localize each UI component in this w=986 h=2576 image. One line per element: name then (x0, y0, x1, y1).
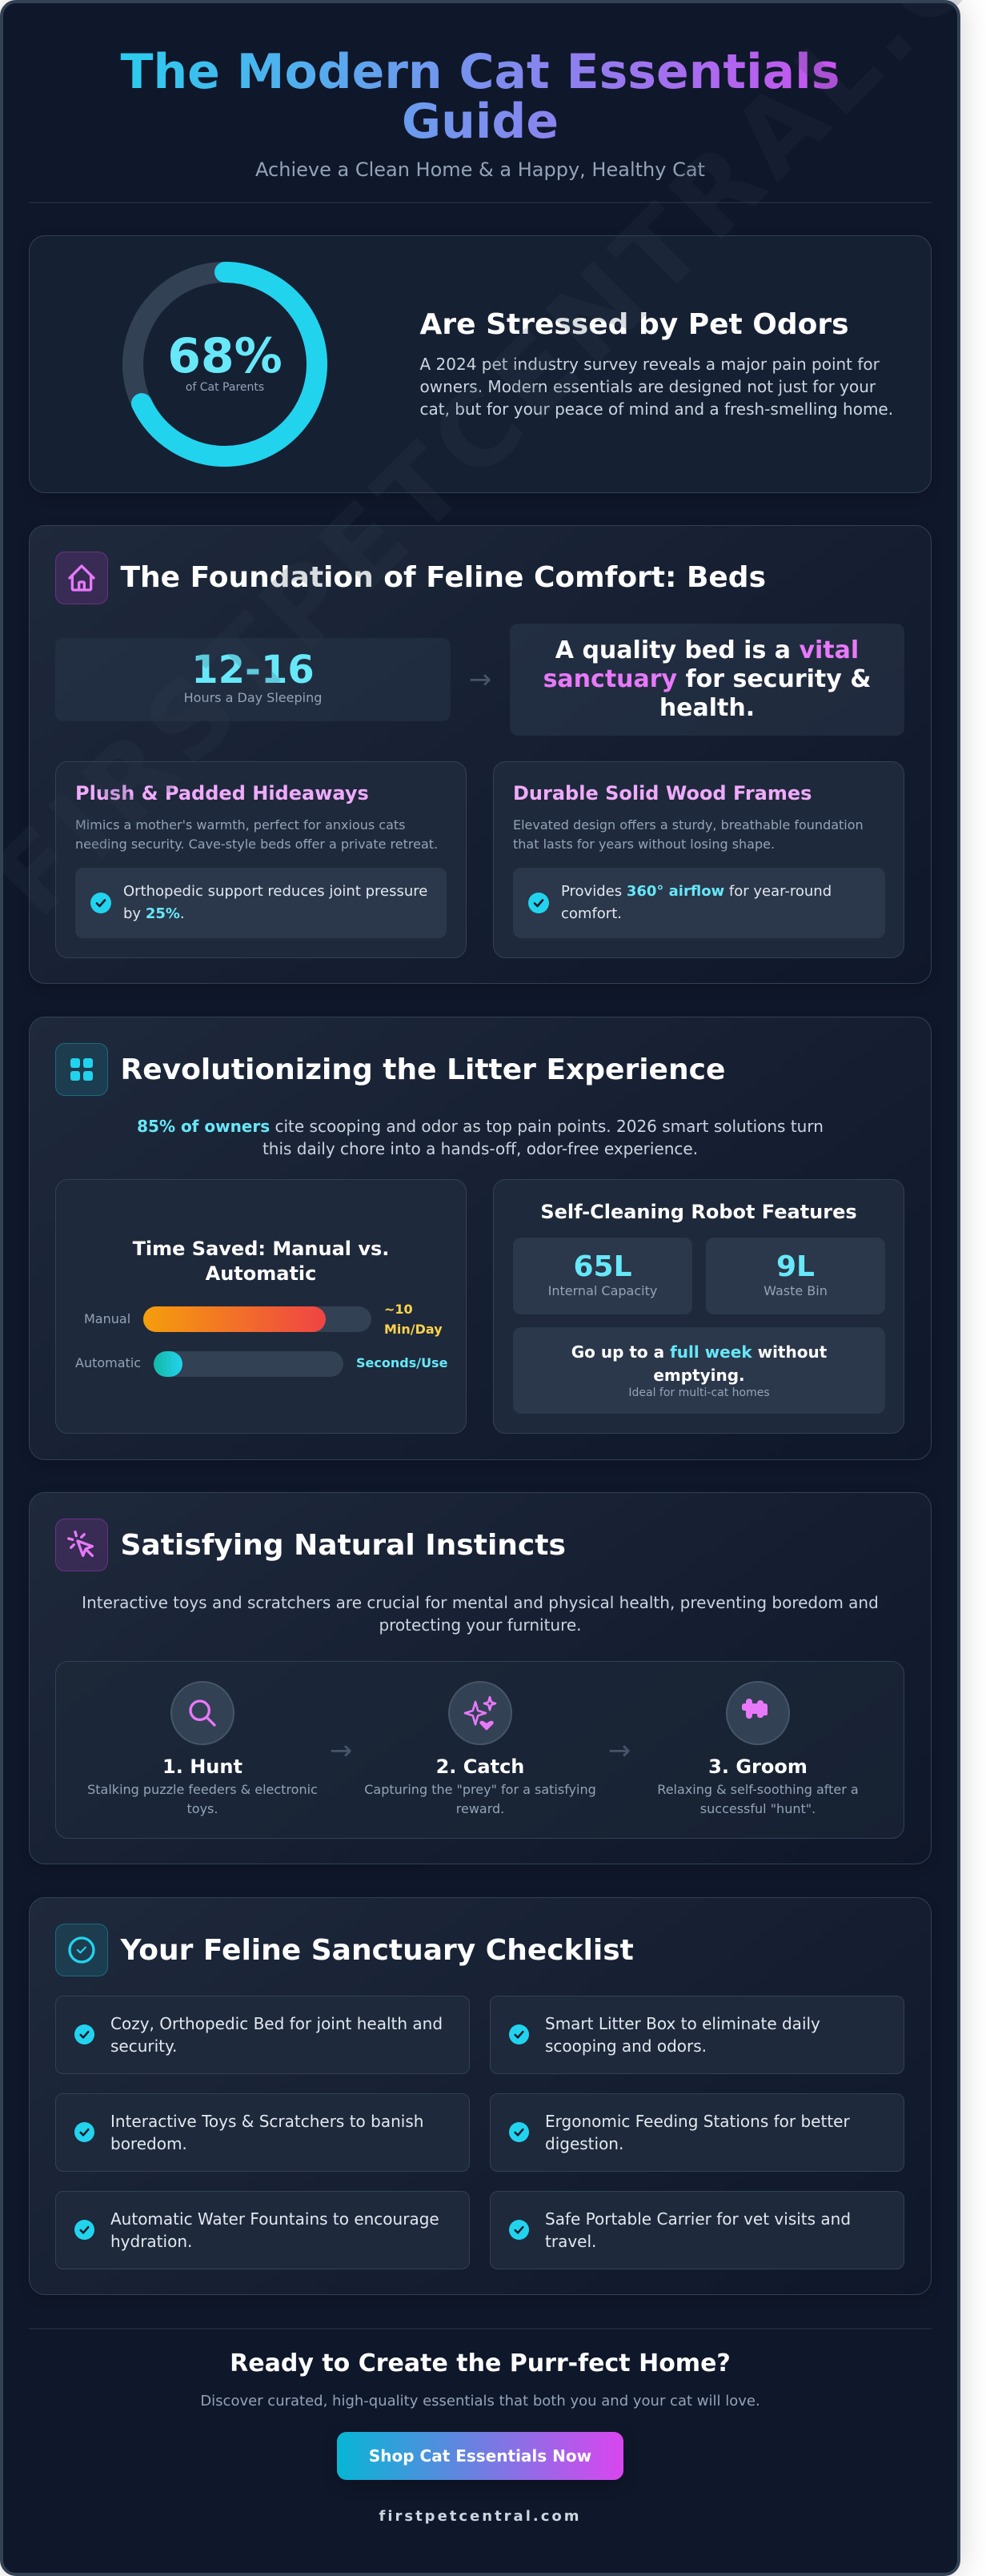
benefit text (123, 883, 427, 922)
heading: litter: Revolutionizing the Litter Experience (120, 1053, 725, 1086)
chart heading: Automatic (206, 1262, 316, 1285)
instincts intro: Interactive toys and scratchers are crucial for mental and physical health, preventing boredom and (82, 1593, 879, 1612)
card: wood frames (493, 761, 904, 958)
item text: Cozy, Orthopedic Bed for joint health and (110, 2014, 443, 2033)
callout text: health. (659, 694, 755, 722)
website: firstpetcentral.com (379, 2508, 581, 2525)
donut value: 68% (167, 328, 283, 384)
bar value: manual: Min/Day (384, 1322, 443, 1337)
icon: check circle (55, 1924, 108, 1976)
item text: Automatic Water Fountains to encourage (110, 2209, 439, 2229)
arrow: → (330, 1735, 352, 1767)
card description: needing security. Cave-style beds offer a private retreat. (75, 837, 438, 852)
stat description (419, 355, 893, 419)
capacity value: 65L (573, 1250, 632, 1283)
item text (110, 2209, 439, 2251)
button: shop now: Shop Cat Essentials Now (369, 2446, 591, 2466)
panel: pet odor stat (29, 235, 932, 493)
callout text (571, 1342, 827, 1385)
robot heading: Self-Cleaning Robot Features (540, 1201, 857, 1223)
subtitle: Achieve a Clean Home & a Happy, Healthy Cat (255, 158, 705, 181)
callout text: A quality bed is a vital (555, 636, 859, 664)
icon: sparkles (464, 1695, 496, 1731)
donut chart: 68 percent (122, 262, 327, 467)
icon: check (509, 2024, 529, 2044)
callout: full week (513, 1327, 885, 1414)
card description: Elevated design offers a sturdy, breathable foundation (513, 817, 864, 833)
callout text (543, 636, 871, 722)
item text: Interactive Toys & Scratchers to banish (110, 2112, 423, 2131)
item text (545, 2209, 851, 2251)
stat: waste bin (706, 1238, 885, 1314)
chart heading: Time Saved: Manual vs. (133, 1238, 389, 1260)
card heading: Plush & Padded Hideaways (75, 782, 369, 804)
item text (545, 2112, 850, 2153)
benefit text: by 25%. (123, 905, 185, 922)
footer heading: Ready to Create the Purr-fect Home? (230, 2349, 731, 2377)
bar value: manual: ~10 (384, 1302, 413, 1317)
arrow: → (469, 664, 491, 696)
item text: Smart Litter Box to eliminate daily (545, 2014, 820, 2033)
item text (110, 2014, 443, 2056)
bar label: automatic: Automatic (75, 1355, 141, 1370)
item text: Ergonomic Feeding Stations for better (545, 2112, 850, 2131)
icon: check (74, 2220, 94, 2240)
item text: security. (110, 2036, 177, 2056)
icon: check (528, 893, 549, 913)
stat box: sleeping hours (55, 638, 451, 721)
sleeping label: Hours a Day Sleeping (184, 690, 322, 705)
capacity label: Internal Capacity (548, 1283, 657, 1298)
litter intro (137, 1117, 824, 1158)
title: The Modern Cat Essentials (121, 44, 840, 100)
panel: litter (29, 1017, 932, 1460)
title: Guide (402, 94, 559, 150)
sleeping value: 12-16 (191, 648, 315, 692)
card: robot features (493, 1179, 904, 1434)
icon: check (74, 2122, 94, 2142)
card: time saved chart (55, 1179, 467, 1434)
stat description: owners. Modern essentials are designed not just for your (419, 377, 876, 396)
step text: groom (657, 1782, 859, 1816)
step title: catch: 2. Catch (436, 1755, 524, 1778)
litter intro: this daily chore into a hands-off, odor-free experience. (263, 1139, 698, 1158)
step icon: groom (726, 1681, 790, 1745)
checklist item 1 (55, 1996, 470, 2074)
benefit box (513, 868, 885, 938)
litter intro: 85% of owners cite scooping and odor as top pain points. 2026 smart solutions turn (137, 1117, 824, 1136)
checklist item 2 (490, 1996, 904, 2074)
benefit text: Orthopedic support reduces joint pressure (123, 883, 427, 900)
donut label: of Cat Parents (186, 381, 264, 394)
item text (110, 2112, 423, 2153)
waste bin value: 9L (776, 1250, 815, 1283)
item text: digestion. (545, 2134, 623, 2153)
panel: beds (29, 525, 932, 984)
footer text: Discover curated, high-quality essentials that both you and your cat will love. (200, 2393, 760, 2409)
stat description: A 2024 pet industry survey reveals a major pain point for (419, 355, 880, 374)
item text: travel. (545, 2232, 596, 2251)
callout text: Go up to a full week without (571, 1342, 827, 1362)
heading: instincts: Satisfying Natural Instincts (120, 1529, 566, 1562)
item text (545, 2014, 820, 2056)
step icon: hunt (170, 1681, 234, 1745)
card: plush hideaways (55, 761, 467, 958)
icon: check (74, 2024, 94, 2044)
bar: manual (143, 1306, 371, 1332)
panel: instincts (29, 1492, 932, 1864)
panel: checklist (29, 1897, 932, 2295)
bar: automatic (154, 1351, 343, 1377)
checklist item 5 (55, 2191, 470, 2269)
icon: home (55, 552, 108, 604)
checklist item 4 (490, 2093, 904, 2172)
icon: check (90, 893, 111, 913)
steps panel (55, 1661, 904, 1839)
step text: groom: Relaxing & self-soothing after a (657, 1782, 859, 1797)
step text: catch (364, 1782, 596, 1816)
button: shop now (337, 2432, 623, 2480)
step icon: catch (448, 1681, 512, 1745)
callout text: emptying. (653, 1366, 745, 1385)
icon: puzzle blob (742, 1699, 768, 1719)
stat: capacity (513, 1238, 692, 1314)
benefit text (561, 883, 832, 922)
bar value: automatic: Seconds/Use (356, 1355, 447, 1370)
card description: Mimics a mother's warmth, perfect for anxious cats (75, 817, 405, 833)
step title: hunt: 1. Hunt (162, 1755, 242, 1778)
icon: grid (55, 1043, 108, 1096)
item text: scooping and odors. (545, 2036, 707, 2056)
step text: catch: reward. (456, 1801, 504, 1816)
callout: quality bed (510, 624, 904, 736)
callout note: Ideal for multi-cat homes (628, 1386, 770, 1399)
step text: hunt (87, 1782, 318, 1816)
checklist item 6 (490, 2191, 904, 2269)
benefit text: comfort. (561, 905, 622, 922)
waste bin label: Waste Bin (764, 1283, 828, 1298)
icon: check (509, 2220, 529, 2240)
step text: hunt: Stalking puzzle feeders & electronic (87, 1782, 318, 1797)
instincts intro (82, 1593, 879, 1635)
bar label: manual: Manual (84, 1311, 130, 1326)
item text: boredom. (110, 2134, 187, 2153)
heading: beds: The Foundation of Feline Comfort: Beds (120, 561, 766, 594)
step text: catch: Capturing the "prey" for a satisfying (364, 1782, 596, 1797)
bar value: manual (384, 1302, 443, 1337)
card description: that lasts for years without losing shape. (513, 837, 775, 852)
step title: groom: 3. Groom (708, 1755, 808, 1778)
card heading: Durable Solid Wood Frames (513, 782, 812, 804)
item text: Safe Portable Carrier for vet visits and (545, 2209, 851, 2229)
icon: search (189, 1699, 216, 1727)
callout text: sanctuary for security & (543, 665, 871, 693)
stat heading: Are Stressed by Pet Odors (419, 308, 849, 341)
arrow: → (608, 1735, 631, 1767)
card description (513, 817, 864, 852)
step text: hunt: toys. (187, 1801, 218, 1816)
item text: hydration. (110, 2232, 192, 2251)
instincts intro: protecting your furniture. (379, 1615, 582, 1635)
card description (75, 817, 438, 852)
step text: groom: successful "hunt". (700, 1801, 816, 1816)
benefit box (75, 868, 447, 938)
chart heading (133, 1238, 389, 1285)
stat description: cat, but for your peace of mind and a fresh-smelling home. (419, 399, 893, 419)
heading: checklist: Your Feline Sanctuary Checklist (120, 1934, 634, 1967)
icon: check (509, 2122, 529, 2142)
title (29, 48, 932, 146)
checklist item 3 (55, 2093, 470, 2172)
icon: cursor click (55, 1519, 108, 1571)
benefit text: Provides 360° airflow for year-round (561, 883, 832, 900)
